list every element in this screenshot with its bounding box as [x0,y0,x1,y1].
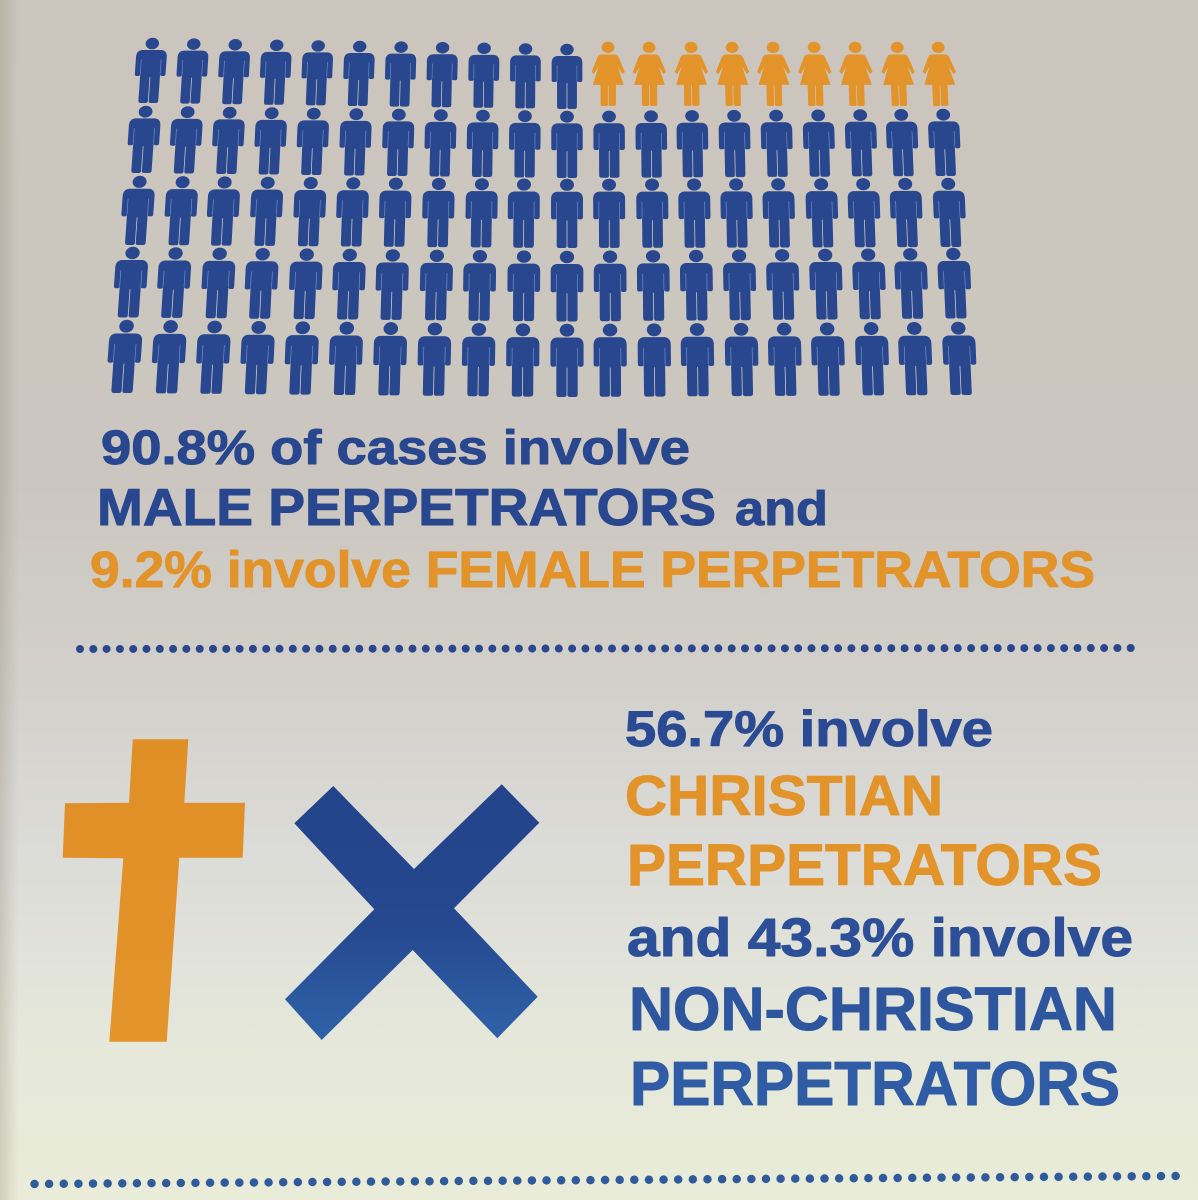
icon: Christian cross [63,739,245,1042]
line: perpetrators blue: PERPETRATORS [630,1050,1120,1119]
text block: religion statistics [625,701,1133,1119]
line: 90.8% of cases involve: 90.8% of cases involve [101,422,690,475]
line: and: and [735,483,828,536]
line: Christian: CHRISTIAN [625,764,943,828]
dotted divider 1 [80,648,1131,649]
row 5: male figures [105,320,978,397]
icon: blue X for non-Christian [285,784,539,1040]
line: male perpetrators: MALE PERPETRATORS [97,479,716,537]
pictogram: 100 figures by gender [105,38,978,397]
line: 9.2% involve female perpetrators: 9.2% involve FEMALE PERPETRATORS [90,541,1095,598]
row 1: eleven male figures [133,38,582,109]
row 3: male figures [119,176,967,248]
line: non-Christian: NON-CHRISTIAN [629,975,1117,1043]
line: 56.7% involve: 56.7% involve [625,701,993,757]
row 2: male figures [126,106,962,178]
row 4: male figures [112,247,972,322]
row 1: nine female figures [591,42,957,106]
line: and 43.3% involve: and 43.3% involve [627,908,1133,968]
dotted divider 2 [34,1176,1177,1184]
line: perpetrators orange: PERPETRATORS [627,833,1102,898]
text block: gender statistics [90,422,1095,598]
